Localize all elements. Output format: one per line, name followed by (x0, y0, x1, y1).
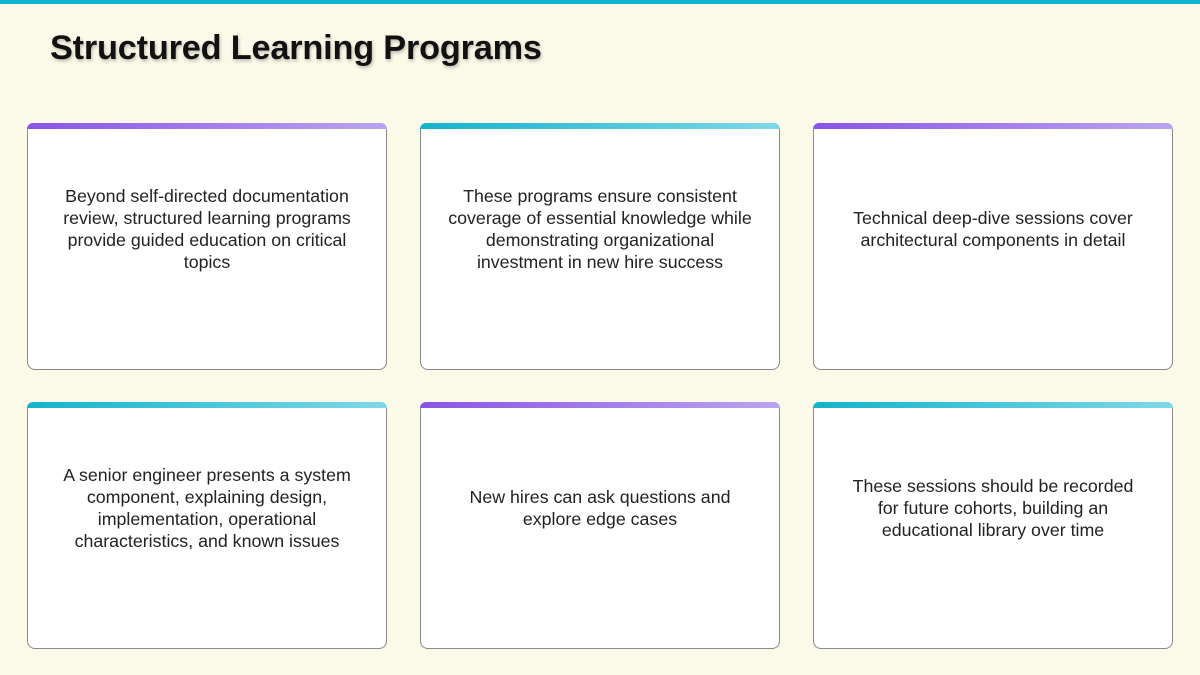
text: card 6: These sessions should be recorded for future cohorts, building an educational library over time (853, 476, 1133, 540)
panel: card 4 (27, 402, 387, 649)
text: card 4: A senior engineer presents a system component, explaining design, implementation, operational characteristics, and known issues (63, 465, 351, 551)
title: Structured Learning Programs (50, 29, 542, 67)
panel: card 3 (813, 123, 1173, 370)
panel: card 6 (813, 402, 1173, 649)
text: card 3: Technical deep-dive sessions cover architectural components in detail (853, 208, 1133, 250)
text: card 1: Beyond self-directed documentation review, structured learning programs provide guided education on critical topics (63, 186, 351, 272)
text: card 2: These programs ensure consistent coverage of essential knowledge while demonstrating organizational investment in new hire success (448, 186, 752, 272)
panel: card 1 (27, 123, 387, 370)
text: card 5: New hires can ask questions and explore edge cases (470, 487, 730, 529)
panel: card 2 (420, 123, 780, 370)
panel: card 5 (420, 402, 780, 649)
